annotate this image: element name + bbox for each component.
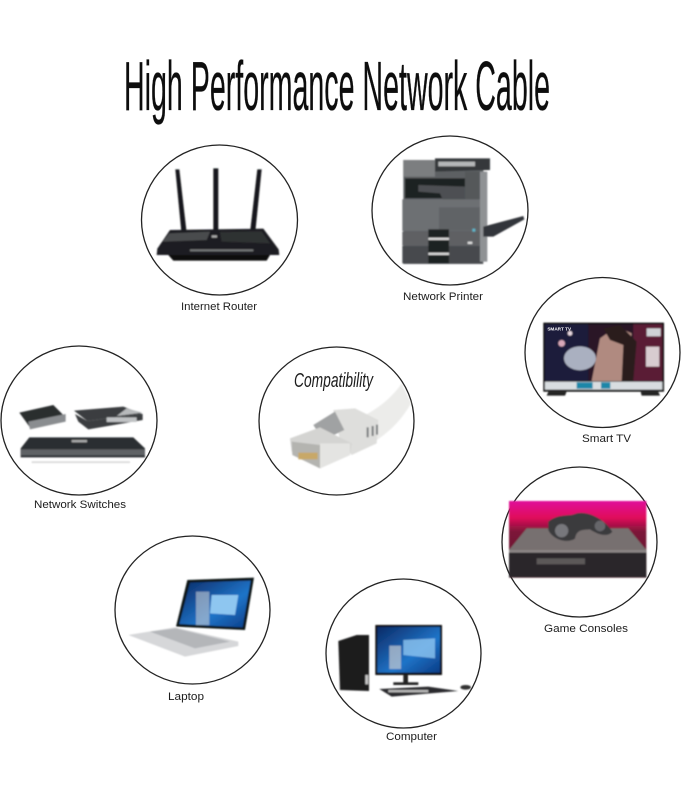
icon: laptop: [128, 578, 254, 657]
circle: compatibility: [259, 347, 414, 495]
circle: printer: [372, 136, 528, 285]
circle: laptop: [115, 536, 270, 684]
icon: smart tv: [543, 323, 664, 396]
circle: switches: [1, 346, 157, 495]
circle: game consoles: [502, 467, 657, 617]
label: laptop: Laptop: [168, 691, 204, 703]
panel: network switches: [1, 346, 157, 511]
icon: desktop computer: [338, 625, 471, 697]
icon: ethernet plug: [290, 383, 411, 468]
label: computer: Computer: [386, 731, 437, 743]
label: internet router: Internet Router: [181, 301, 257, 313]
panel: laptop: [115, 536, 270, 703]
label: on-screen smart tv: SMART TV: [547, 326, 572, 331]
label: smart tv: Smart TV: [582, 433, 632, 445]
label: network printer: Network Printer: [403, 291, 483, 303]
icon: switches: [19, 405, 145, 463]
circle: router: [142, 145, 298, 295]
label: game consoles: Game Consoles: [544, 623, 629, 635]
label: compatibility: Compatibility: [294, 370, 374, 392]
panel: compatibility: [259, 347, 414, 495]
panel: smart tv: [525, 278, 680, 445]
icon: router: [157, 168, 279, 261]
panel: internet router: [142, 145, 298, 313]
circle: smart tv: [525, 278, 680, 428]
icon: printer: [402, 158, 524, 264]
icon: game console: [509, 501, 646, 578]
circle: computer: [326, 579, 481, 728]
panel: computer: [326, 579, 481, 743]
label: network switches: Network Switches: [34, 499, 127, 511]
panel: network printer: [372, 136, 528, 303]
panel: game consoles: [502, 467, 657, 635]
